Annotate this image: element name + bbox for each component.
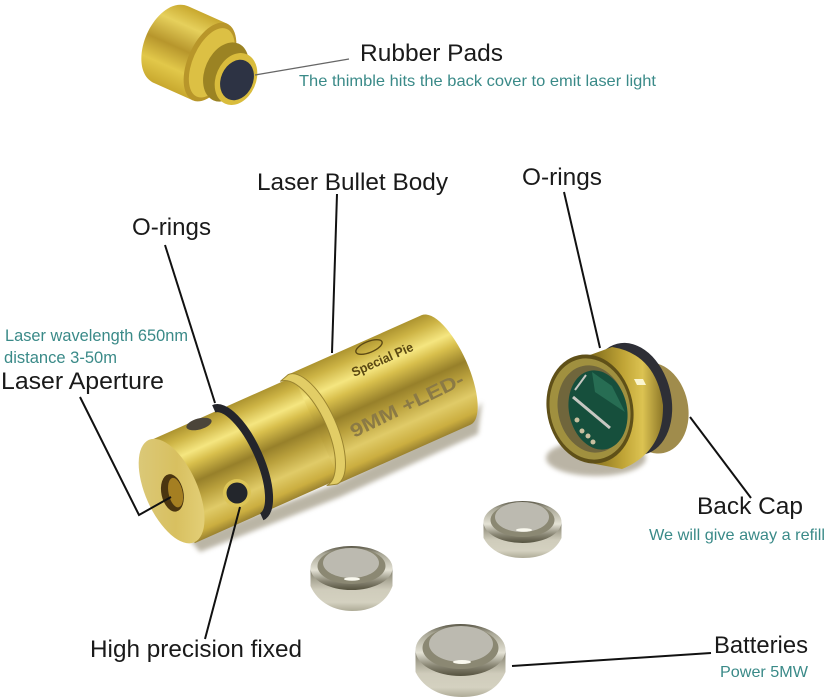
text: rubber pads description: The thimble hits the back cover to emit laser light (299, 73, 657, 90)
engraved logo (354, 337, 384, 357)
front section (149, 377, 339, 543)
engraved model text: 9MM +LED- (347, 369, 468, 442)
rear section (288, 306, 491, 484)
heading: batteries: Batteries (714, 632, 808, 659)
icon: battery left (310, 546, 392, 611)
text: distance: distance 3-50m (4, 348, 117, 367)
engraved brand text: Special Pie (349, 339, 416, 380)
icon: laser bullet body (124, 306, 491, 557)
icon: battery bottom (416, 624, 506, 697)
icon: rubber pad thimble (130, 0, 265, 112)
icon: top set screw (185, 415, 213, 433)
heading: laser aperture: Laser Aperture (1, 368, 164, 395)
spring contact (573, 397, 610, 428)
heading: right o-rings: O-rings (522, 164, 602, 191)
line: right o-rings leader (564, 192, 600, 348)
front flange (537, 346, 643, 472)
threads (590, 347, 663, 469)
heading: back cap: Back Cap (697, 493, 803, 520)
heading: rubber pads: Rubber Pads (360, 40, 503, 67)
line: left o-rings leader (165, 245, 215, 403)
icon: rubber pad disc (214, 54, 260, 106)
o-ring (214, 400, 282, 517)
text: back cap note: We will give away a refill (649, 527, 825, 544)
heading: left o-rings: O-rings (132, 214, 211, 241)
o-ring (578, 334, 684, 464)
line: high precision leader (205, 507, 240, 639)
line: back cap leader (690, 417, 751, 498)
laser aperture hole (150, 468, 194, 518)
heading: high precision fixed: High precision fixed (90, 636, 302, 663)
shoulder step (279, 365, 359, 488)
solder pads (574, 418, 596, 444)
line: laser bullet body leader (332, 194, 337, 353)
circuit board (561, 365, 635, 455)
text: laser wavelength: Laser wavelength 650nm (5, 326, 188, 345)
icon: back cap (537, 334, 697, 476)
icon: side set screw (223, 479, 251, 507)
icon: battery top right (484, 501, 562, 558)
front face (125, 429, 218, 553)
text: batteries power: Power 5MW (720, 664, 809, 681)
line: batteries leader (512, 653, 711, 666)
shadow under bullet (190, 402, 482, 552)
rear dome (611, 356, 697, 460)
line: rubber pads leader (255, 59, 349, 75)
line: laser aperture leader (80, 397, 171, 515)
heading: laser bullet body: Laser Bullet Body (257, 169, 448, 196)
